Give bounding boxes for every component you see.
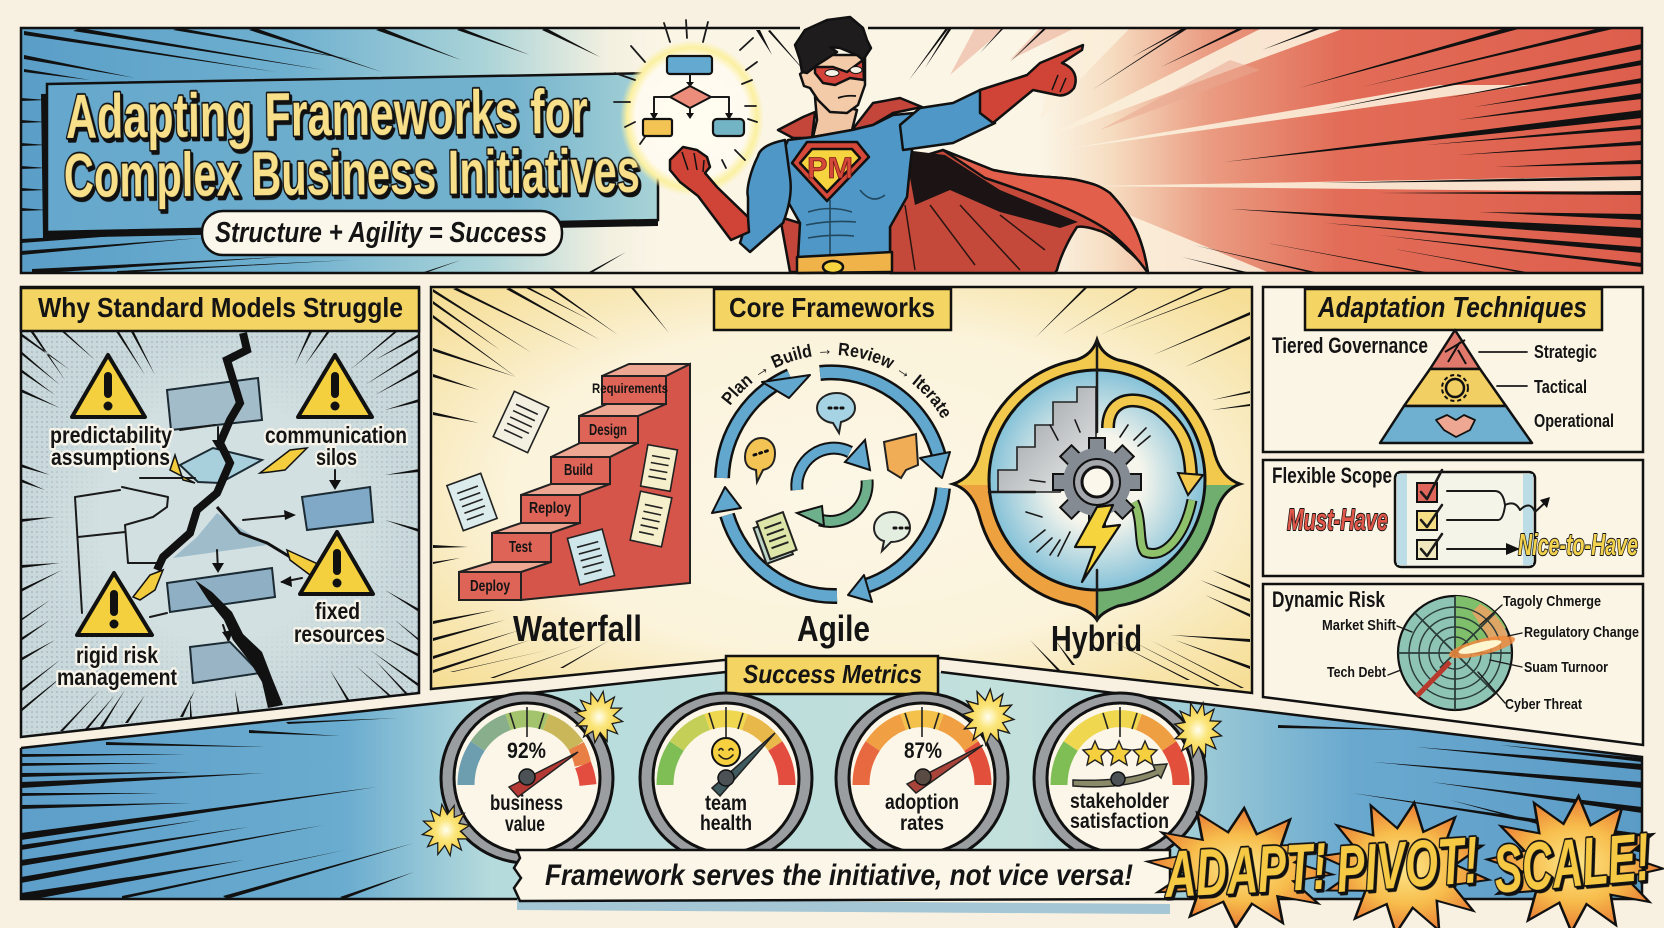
panel: core frameworks <box>430 286 1254 694</box>
heading: core frameworks: Core Frameworks <box>729 292 935 323</box>
heading: adaptation techniques <box>1305 289 1602 330</box>
label: rigid risk management: management <box>57 664 177 690</box>
sparkle bursts <box>418 687 1226 860</box>
radar labels: Cyber Threat <box>1505 696 1582 713</box>
subtitle pill: Structure + Agility = Success <box>215 217 547 249</box>
step labels: Deploy <box>470 578 510 595</box>
gauge: team health: health <box>700 812 752 835</box>
callout banner <box>514 850 1170 914</box>
warning icon: resources <box>300 532 373 594</box>
yellow arrow <box>1108 400 1203 553</box>
heading: adaptation techniques: Adaptation Techniques <box>1317 292 1587 324</box>
gauge: stakeholder satisfaction: satisfaction <box>1070 810 1169 833</box>
gauge: team health <box>640 693 812 863</box>
gauge: business value: 92% <box>507 738 546 763</box>
agile cycle <box>711 342 951 604</box>
burst: adapt: ADAPT! <box>1162 829 1329 911</box>
tier labels: Tactical <box>1534 377 1587 397</box>
radar labels: Tech Debt <box>1327 664 1386 681</box>
panel: success metrics band <box>21 656 1642 899</box>
label: dynamic risk: Dynamic Risk <box>1272 587 1386 612</box>
flying documents <box>447 391 677 585</box>
waterfall staircase <box>459 364 690 600</box>
radar labels <box>1322 593 1639 713</box>
heading: success metrics: Success Metrics <box>743 659 922 689</box>
tier labels: Operational <box>1534 411 1614 431</box>
tier leader lines <box>1479 352 1527 386</box>
mask <box>815 60 864 85</box>
heading: why standard models struggle <box>21 288 419 331</box>
subtitle pill <box>202 211 562 255</box>
cape <box>780 150 1148 273</box>
inner cycle <box>797 440 870 526</box>
gauge: business value: business <box>490 792 563 815</box>
panel: why standard models struggle <box>21 287 419 737</box>
label: rigid risk management <box>57 642 177 690</box>
label: waterfall: Waterfall <box>513 608 642 649</box>
lightning bolt <box>1075 505 1120 582</box>
hair <box>795 17 871 73</box>
label: must-have: Must-Have <box>1287 502 1388 537</box>
step labels: Requirements <box>592 380 668 396</box>
warning icon: communication <box>298 355 372 417</box>
broken process flow <box>75 378 373 683</box>
radar labels: Suam Turnoor <box>1524 659 1608 676</box>
header banner panel <box>21 25 1642 273</box>
step labels: Reploy <box>529 500 571 517</box>
callout banner: Framework serves the initiative, not vice versa! <box>545 859 1133 892</box>
chest shield: PM <box>807 152 853 185</box>
superhero figure <box>670 17 1148 273</box>
label: flexible scope: Flexible Scope <box>1272 463 1392 488</box>
gauge: stakeholder satisfaction: stakeholder <box>1070 790 1169 813</box>
gauge: team health: team <box>705 792 747 815</box>
raised glove <box>670 147 749 240</box>
chest shield <box>792 142 869 201</box>
radar labels: Regulatory Change <box>1524 624 1639 641</box>
radar labels: Market Shift <box>1322 617 1396 634</box>
torso <box>775 112 925 258</box>
heading: why standard models struggle: Why Standard Models Struggle <box>38 292 403 323</box>
checklist <box>1395 470 1550 567</box>
icon: glowing flowchart <box>614 20 764 196</box>
panel: dynamic risk <box>1263 584 1643 745</box>
lightning accents <box>133 448 320 600</box>
label: tiered governance: Tiered Governance <box>1272 333 1428 358</box>
belt <box>797 252 892 273</box>
step labels: Build <box>564 462 593 479</box>
raised arm <box>740 140 791 252</box>
gauge: adoption rates: 87% <box>904 738 942 763</box>
burst: pivot <box>1312 791 1498 928</box>
step labels: Design <box>589 422 627 439</box>
radar labels: Tagoly Chmerge <box>1503 593 1601 610</box>
warning icon: risk <box>77 573 152 635</box>
gauge: adoption rates: adoption <box>885 791 959 814</box>
burst: pivot: PIVOT! <box>1334 822 1481 906</box>
label: communication silos <box>265 422 407 470</box>
gauge: stakeholder satisfaction <box>1034 693 1206 863</box>
agile step text: Plan → Build → Review → Iterate <box>721 342 949 418</box>
label: predictability assumptions: assumptions <box>51 444 170 470</box>
step labels: Test <box>509 539 532 556</box>
gear <box>1053 438 1141 526</box>
label: hybrid: Hybrid <box>1051 618 1142 659</box>
tier labels: Strategic <box>1534 342 1597 362</box>
label: communication silos: communication <box>265 422 407 448</box>
label: agile: Agile <box>797 608 870 649</box>
step labels <box>470 380 668 595</box>
crack <box>157 333 300 708</box>
label: fixed resources: fixed <box>315 598 360 624</box>
burst callouts <box>1143 791 1664 928</box>
label: communication silos: silos <box>316 444 357 470</box>
title block <box>41 73 658 238</box>
radar leader lines <box>1388 605 1522 703</box>
collar <box>778 112 815 138</box>
abs <box>806 190 885 254</box>
gauge: business value: value <box>505 813 545 836</box>
label: fixed resources <box>294 598 385 647</box>
gauge: business value <box>441 693 613 863</box>
governance pyramid <box>1380 330 1532 443</box>
pointing arm <box>900 90 995 150</box>
gauge: adoption rates: rates <box>900 812 944 835</box>
chat bubbles and notes <box>745 393 918 564</box>
panel: adaptation techniques tiered governance <box>1263 287 1643 452</box>
risk radar <box>1398 596 1517 710</box>
gauge: adoption rates <box>836 693 1008 863</box>
warning icon: predictability <box>72 355 145 417</box>
title line 1: Adapting Frameworks for <box>65 78 588 152</box>
neck <box>813 97 857 137</box>
title line 2: Complex Business Initiatives <box>64 137 640 211</box>
label: fixed resources: resources <box>294 621 385 647</box>
pointing glove <box>980 45 1083 123</box>
label: rigid risk management: rigid risk <box>76 642 158 668</box>
burst: adapt <box>1143 802 1337 928</box>
heading: core frameworks <box>714 289 951 330</box>
hybrid emblem <box>950 335 1244 625</box>
burst: scale <box>1484 791 1664 928</box>
face <box>800 55 865 113</box>
tier labels <box>1534 342 1614 431</box>
label: predictability assumptions: predictability <box>50 422 172 448</box>
label: predictability assumptions <box>50 422 172 470</box>
panel: flexible scope <box>1263 460 1643 576</box>
